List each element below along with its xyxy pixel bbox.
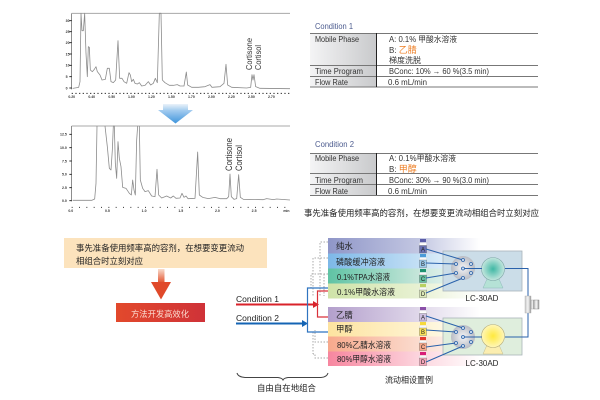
tubing: bottles to valves and pumps to mixer: [426, 249, 528, 362]
bottles group 2: B: [421, 330, 425, 336]
chromatogram 1: 1.50: [168, 95, 175, 99]
bottles group 1: [420, 239, 426, 298]
pump module 2: LC-30AD: [466, 359, 499, 368]
brace: [237, 373, 328, 380]
chromatogram 2: min: [283, 209, 290, 213]
condition 2 route: [236, 288, 328, 332]
bottles group 2: A: [421, 316, 425, 322]
table: condition 1: [310, 33, 538, 87]
chromatogram 1: 5: [66, 75, 68, 79]
mixer: [525, 296, 539, 313]
peak label: Cortisol: Cortisol: [253, 45, 263, 70]
solvent group 2: 80%乙腈水溶液: [337, 340, 392, 350]
bottles group 1: B: [421, 262, 425, 268]
chromatogram 2: 5.0: [62, 173, 67, 177]
table heading: Condition 1: Condition 1: [315, 22, 354, 31]
peak label: Cortisone 2: Cortisone: [224, 138, 234, 171]
table: condition 2: [310, 153, 538, 196]
red box: method efficiency: 方法开发高效化: [131, 309, 189, 319]
chromatogram 1: 2.00: [208, 95, 215, 99]
chromatogram 1: 15: [66, 52, 70, 56]
solvent group 2: 乙腈: [336, 310, 353, 320]
chromatogram 1: 0.20: [68, 95, 75, 99]
table: condition 2: B: 甲醇: [389, 163, 417, 174]
chromatogram 2: 0.0: [62, 199, 67, 203]
bottles group 2: [420, 307, 426, 366]
solvent group 1: 0.1%TPA水溶液: [337, 272, 391, 282]
chromatogram 2: 0.5: [105, 209, 110, 213]
bottles group 2: C: [421, 345, 426, 351]
table: condition 1: B: 乙腈: [389, 44, 417, 55]
callout: prepare solvents: 相组合时立刻对应: [76, 256, 143, 266]
chromatogram 2: 12.5: [60, 133, 67, 137]
chromatogram 1: 1.20: [148, 95, 155, 99]
chromatogram 1: 20: [66, 41, 70, 45]
chromatogram 1: 0: [66, 86, 68, 90]
solvent group 1: 磷酸缓冲溶液: [336, 257, 386, 267]
pump module 1: LC-30AD: [466, 294, 499, 303]
condition 1 route: [236, 291, 328, 317]
chromatogram 2: 1.5: [178, 209, 183, 213]
condition 2 route: Condition 2: [236, 313, 279, 323]
chromatogram 2: 10.0: [60, 146, 67, 150]
pump module 1: [443, 251, 522, 303]
chromatogram 1: [66, 13, 290, 99]
peak label: Cortisol 2: Cortisol: [234, 145, 244, 171]
chromatogram 2: 0.0: [68, 209, 73, 213]
chromatogram 2: [60, 126, 290, 213]
solvent group 1: [328, 238, 480, 298]
table: condition 2: A: 0.1%甲酸水溶液: [389, 153, 456, 163]
dotted routing lines: [311, 242, 328, 358]
chromatogram 1: 0.50: [108, 95, 115, 99]
table: condition 1: 梯度洗脱: [389, 55, 421, 65]
solvent group 2: 甲醇: [336, 324, 353, 334]
chromatogram 1: 2.20: [228, 95, 235, 99]
chromatogram 1: 10: [66, 64, 70, 68]
solvent group 1: 0.1%甲酸水溶液: [337, 287, 396, 297]
table: condition 2: Mobile Phase: [315, 154, 359, 163]
table: condition 2: Flow Rate: [315, 187, 349, 196]
caption: flow phase setup example: 流动相设置例: [385, 375, 433, 385]
chromatogram 2: 1.0: [142, 209, 147, 213]
bottles group 1: C: [421, 277, 426, 283]
chromatogram 1: 30: [66, 19, 70, 23]
table: condition 2: BConc: 30% → 90 %(3.0 min): [389, 176, 489, 185]
peak label: Cortisone: Cortisone: [244, 38, 254, 70]
bottles group 1: A: [421, 248, 425, 254]
chromatogram 1: 1.00: [128, 95, 135, 99]
table: condition 1: BConc: 10% → 60 %(3.5 min): [389, 67, 489, 76]
solvent group 2: 80%甲醇水溶液: [337, 354, 392, 364]
chromatogram 1: 2.70: [268, 95, 275, 99]
chromatogram 2: 2.0: [215, 209, 220, 213]
pump module 2: [443, 318, 522, 368]
table heading: Condition 2: Condition 2: [315, 140, 355, 149]
solvent group 1: 纯水: [336, 241, 353, 251]
chromatogram 1: 25: [66, 30, 70, 34]
table: condition 1: A: 0.1% 甲酸水溶液: [389, 34, 457, 44]
bottles group 2: D: [421, 360, 426, 366]
red box: method efficiency: [116, 303, 205, 322]
brace caption: 自由自在地组合: [257, 383, 316, 393]
solvent group 2: [328, 307, 480, 366]
table: condition 1: Flow Rate: [315, 78, 349, 87]
bottles group 1: D: [421, 292, 426, 298]
chromatogram 1: 1.70: [188, 95, 195, 99]
chromatogram 1: 0.40: [88, 95, 95, 99]
table: condition 1: Time Program: [315, 67, 363, 76]
table: condition 1: Mobile Phase: [315, 35, 359, 44]
condition 1 route: Condition 1: [236, 294, 279, 304]
chromatogram 2: 2.5: [252, 209, 257, 213]
table: condition 1: 0.6 mL/min: [388, 78, 427, 87]
valve ports: [454, 258, 472, 348]
red down arrow: [151, 269, 171, 300]
chromatogram 2: 2.5: [62, 186, 67, 190]
callout: prepare solvents: [64, 238, 267, 268]
chromatogram 2: 7.5: [62, 159, 67, 163]
down arrow between chromatograms: [158, 104, 193, 124]
chromatogram 1: 2.50: [248, 95, 255, 99]
note under table 2: 事先准备使用频率高的容剂，在想要变更流动相组合时立刻对应: [304, 208, 539, 218]
table: condition 2: 0.6 mL/min: [388, 187, 427, 196]
table: condition 2: Time Program: [315, 176, 363, 185]
callout: prepare solvents: 事先准备使用频率高的容剂，在想要变更流动: [76, 243, 244, 253]
